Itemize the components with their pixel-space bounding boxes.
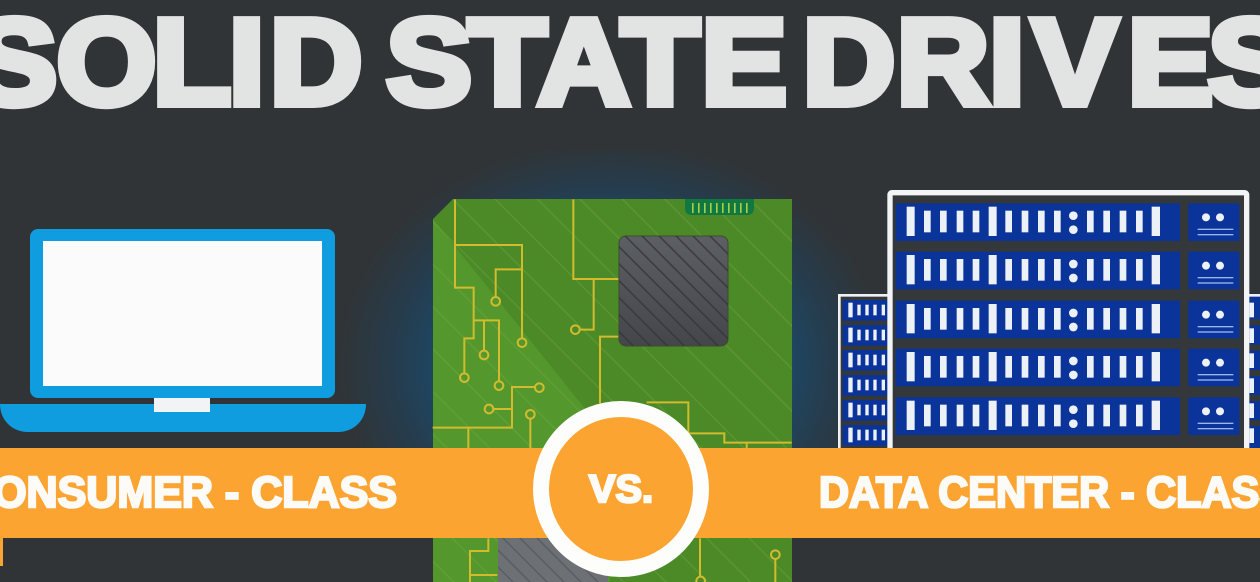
laptop screen — [30, 229, 335, 398]
connector — [685, 199, 754, 215]
front server unit 4 — [896, 349, 1239, 386]
board — [433, 199, 792, 582]
front server frame — [890, 193, 1247, 456]
icon: laptop — [0, 229, 366, 432]
badge circle — [541, 409, 701, 569]
laptop base — [0, 404, 366, 432]
icon: server racks — [839, 193, 1260, 456]
orange banner — [0, 448, 1260, 538]
solid state drive circuit board — [433, 199, 792, 582]
rear server right — [1247, 295, 1260, 452]
chip: memory — [498, 530, 608, 582]
front server unit 3 — [896, 301, 1239, 338]
chip: controller — [619, 236, 728, 346]
laptop display — [43, 241, 322, 386]
laptop notch — [154, 398, 210, 412]
backdrop glow — [190, 150, 1045, 582]
banner tail — [0, 538, 3, 566]
front server unit 2 — [896, 252, 1239, 289]
front server unit 5 — [896, 397, 1239, 435]
versus text: VS. — [589, 468, 653, 511]
circuit traces — [433, 199, 792, 582]
front server unit 1 — [896, 203, 1239, 241]
rear server left — [839, 295, 893, 452]
versus badge — [541, 409, 701, 569]
